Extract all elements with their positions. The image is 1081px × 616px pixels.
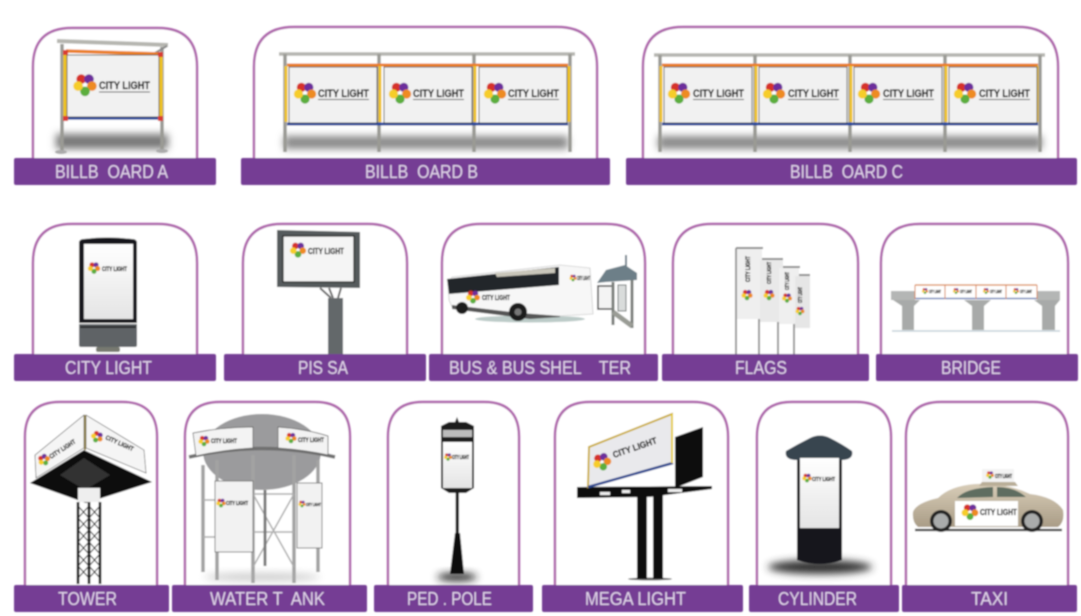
label: taxi <box>902 585 1077 612</box>
bus <box>447 265 593 322</box>
logos: billboard C: CITY LIGHT <box>693 88 744 100</box>
bridge: CITY LIGHT <box>929 289 941 294</box>
label: flags <box>662 354 869 381</box>
panel: water tank <box>185 402 350 587</box>
logos: billboard C <box>668 83 1030 104</box>
panel: flags <box>673 224 858 356</box>
label: city light: CITY LIGHT <box>65 358 152 378</box>
kiosk: CITY LIGHT <box>102 266 127 273</box>
panel: city light <box>33 224 197 356</box>
label: tower: TOWER <box>58 589 117 609</box>
label: billboard B <box>241 158 610 185</box>
cylinder kiosk: CITY LIGHT <box>812 477 835 483</box>
flags: CITY LIGHT <box>785 272 791 290</box>
water tank structure: CITY LIGHT <box>226 501 248 507</box>
label: billboard C: BILLB OARD C <box>790 162 903 182</box>
bus: CITY LIGHT <box>482 293 510 302</box>
water tank structure: CITY LIGHT <box>306 502 321 507</box>
label: ped pole: PED . POLE <box>407 589 492 609</box>
cylinder kiosk <box>768 436 872 574</box>
tower structure: CITY LIGHT <box>104 434 134 453</box>
flags: CITY LIGHT <box>746 256 752 282</box>
flags: CITY LIGHT <box>798 287 804 303</box>
label: PIS SA <box>224 354 426 381</box>
label: cylinder <box>749 585 899 612</box>
mega billboard <box>577 414 712 580</box>
label: mega light: MEGA LIGHT <box>585 589 686 609</box>
label: bus and shelter: BUS & BUS SHEL TER <box>449 358 631 378</box>
panel: bridge <box>881 224 1068 356</box>
label: taxi: TAXI <box>971 589 1008 609</box>
logos: billboard B: CITY LIGHT <box>318 88 369 100</box>
water tank structure <box>189 414 335 583</box>
water tank structure: CITY LIGHT <box>211 439 237 445</box>
bridge: CITY LIGHT <box>990 289 1002 294</box>
bridge: CITY LIGHT <box>1020 289 1032 294</box>
label: city light <box>14 354 216 381</box>
label: billboard C <box>626 158 1077 185</box>
logos: billboard B: CITY LIGHT <box>508 88 559 100</box>
panel: billboard A <box>33 28 197 160</box>
panel: cylinder <box>757 402 891 587</box>
shadow: billboard B <box>284 136 568 149</box>
flags: CITY LIGHT <box>767 262 773 284</box>
tower structure <box>30 415 152 584</box>
logos: billboard B <box>294 83 559 104</box>
bus: CITY LIGHT <box>577 276 590 282</box>
panel: tower <box>25 402 157 587</box>
label: water tank: WATER T ANK <box>210 589 325 609</box>
billboard A structure <box>55 41 168 154</box>
flags <box>736 248 810 355</box>
water tank structure: CITY LIGHT <box>298 438 324 444</box>
PIS sign <box>277 230 360 354</box>
billboard C structure <box>654 55 1045 152</box>
panel: billboard C <box>643 27 1058 160</box>
label: flags: FLAGS <box>735 358 787 378</box>
bridge <box>891 285 1060 331</box>
panel: PIS SA <box>243 224 407 356</box>
panel: taxi <box>906 402 1068 587</box>
logos: billboard C: CITY LIGHT <box>979 88 1030 100</box>
shadow: billboard A <box>56 134 168 149</box>
logo: billboard A: CITY LIGHT <box>99 80 150 92</box>
label: bridge <box>876 354 1078 381</box>
billboard B structure <box>279 54 575 152</box>
taxi car: CITY LIGHT <box>980 508 1017 517</box>
mega billboard: CITY LIGHT <box>611 435 659 460</box>
label: PIS SA: PIS SA <box>298 358 348 378</box>
pole: CITY LIGHT <box>452 455 469 461</box>
label: billboard A: BILLB OARD A <box>55 162 168 182</box>
label: billboard B: BILLB OARD B <box>365 162 478 182</box>
panel: mega light <box>555 402 728 587</box>
kiosk <box>79 238 137 352</box>
bus shelter <box>597 255 637 328</box>
label: bridge: BRIDGE <box>941 358 1001 378</box>
label: water tank <box>172 585 367 612</box>
label: mega light <box>542 585 743 612</box>
PIS sign: CITY LIGHT <box>308 246 345 256</box>
label: bus and shelter <box>429 354 658 381</box>
label: cylinder: CYLINDER <box>778 589 857 609</box>
panel: ped pole <box>388 402 519 587</box>
logos: billboard B: CITY LIGHT <box>413 88 464 100</box>
taxi car: CITY LIGHT <box>995 474 1012 480</box>
taxi car <box>913 469 1063 532</box>
logos: billboard C: CITY LIGHT <box>883 88 934 100</box>
label: ped pole <box>374 585 533 612</box>
logos: billboard C: CITY LIGHT <box>788 88 839 100</box>
label: billboard A <box>14 158 216 185</box>
pole <box>437 417 477 581</box>
panel: bus and shelter <box>442 224 645 356</box>
panel: billboard B <box>254 27 597 160</box>
label: tower <box>14 585 169 612</box>
bridge: CITY LIGHT <box>960 289 972 294</box>
shadow: billboard C <box>658 136 1042 149</box>
tower structure: CITY LIGHT <box>48 438 77 461</box>
logo: billboard A <box>73 74 150 96</box>
